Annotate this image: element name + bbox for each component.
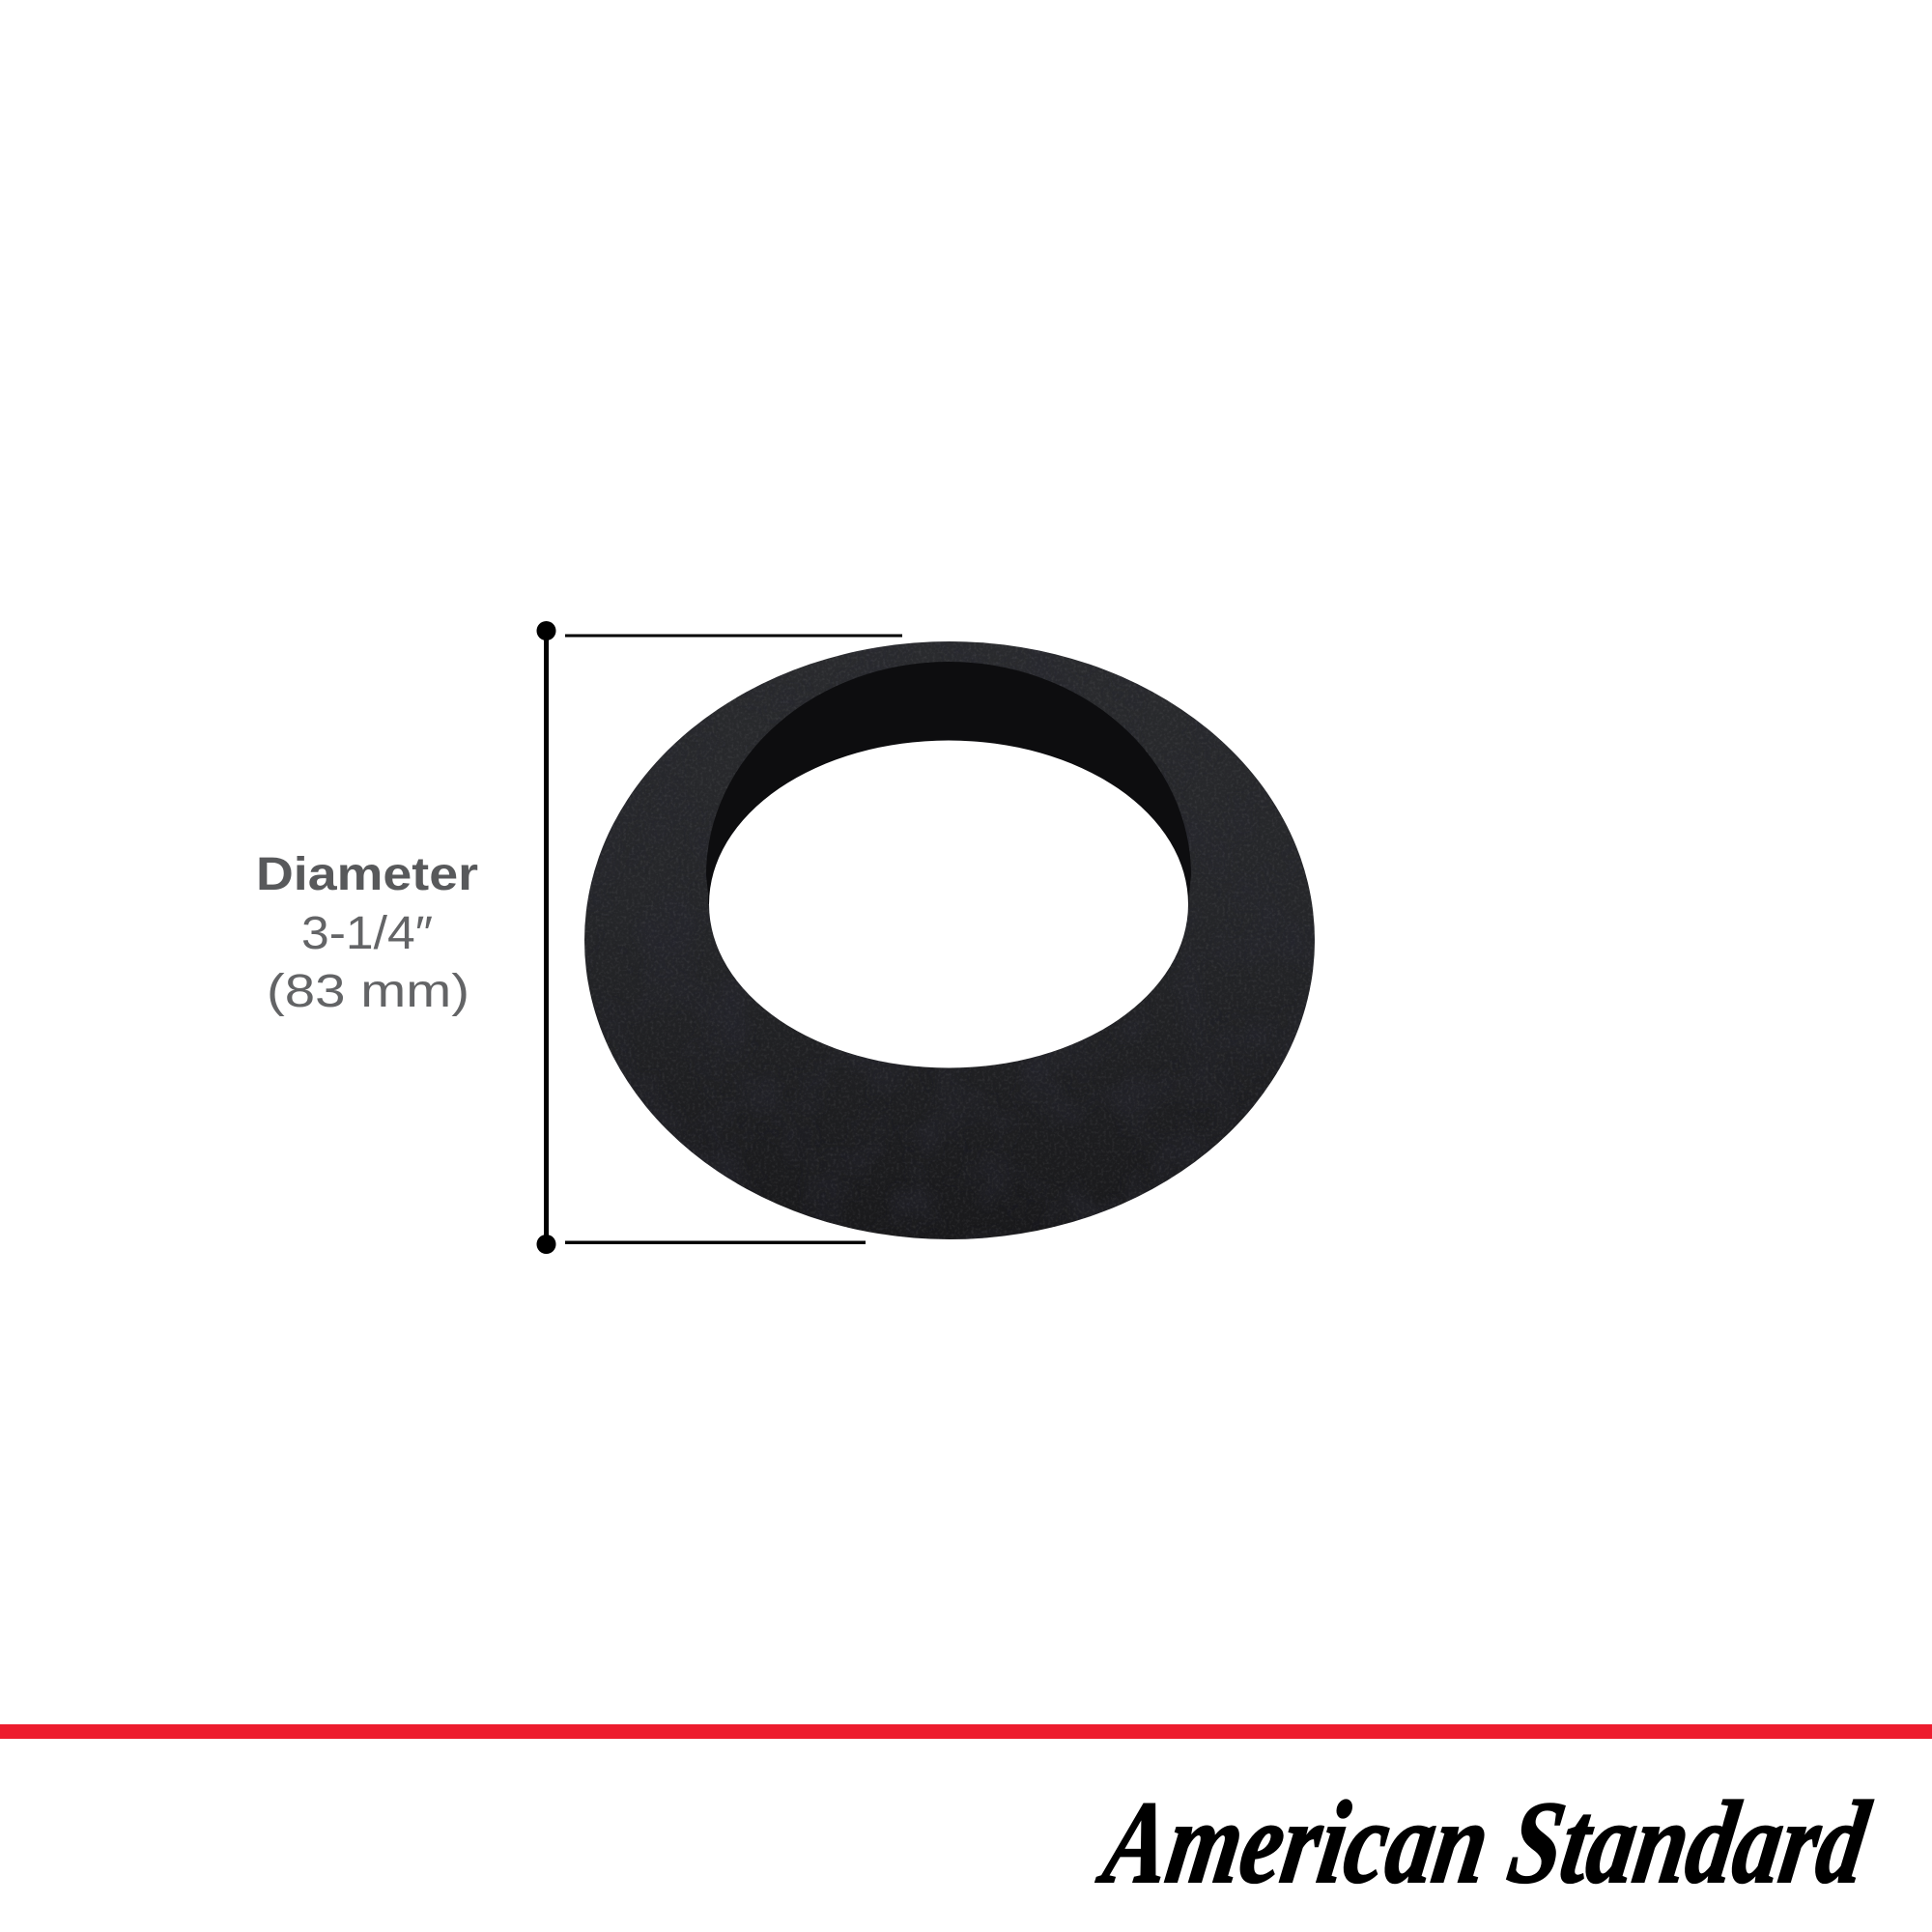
- dimension label: (83 mm): [267, 966, 469, 1017]
- photo: black rubber gasket ring: [584, 641, 1315, 1239]
- red footer rule: [0, 1724, 1932, 1739]
- dimension label: [256, 849, 478, 1017]
- dimension bracket: diameter measure: [537, 621, 902, 1254]
- dimension label: Diameter: [256, 849, 478, 900]
- dimension label: 3-1/4″: [301, 908, 433, 959]
